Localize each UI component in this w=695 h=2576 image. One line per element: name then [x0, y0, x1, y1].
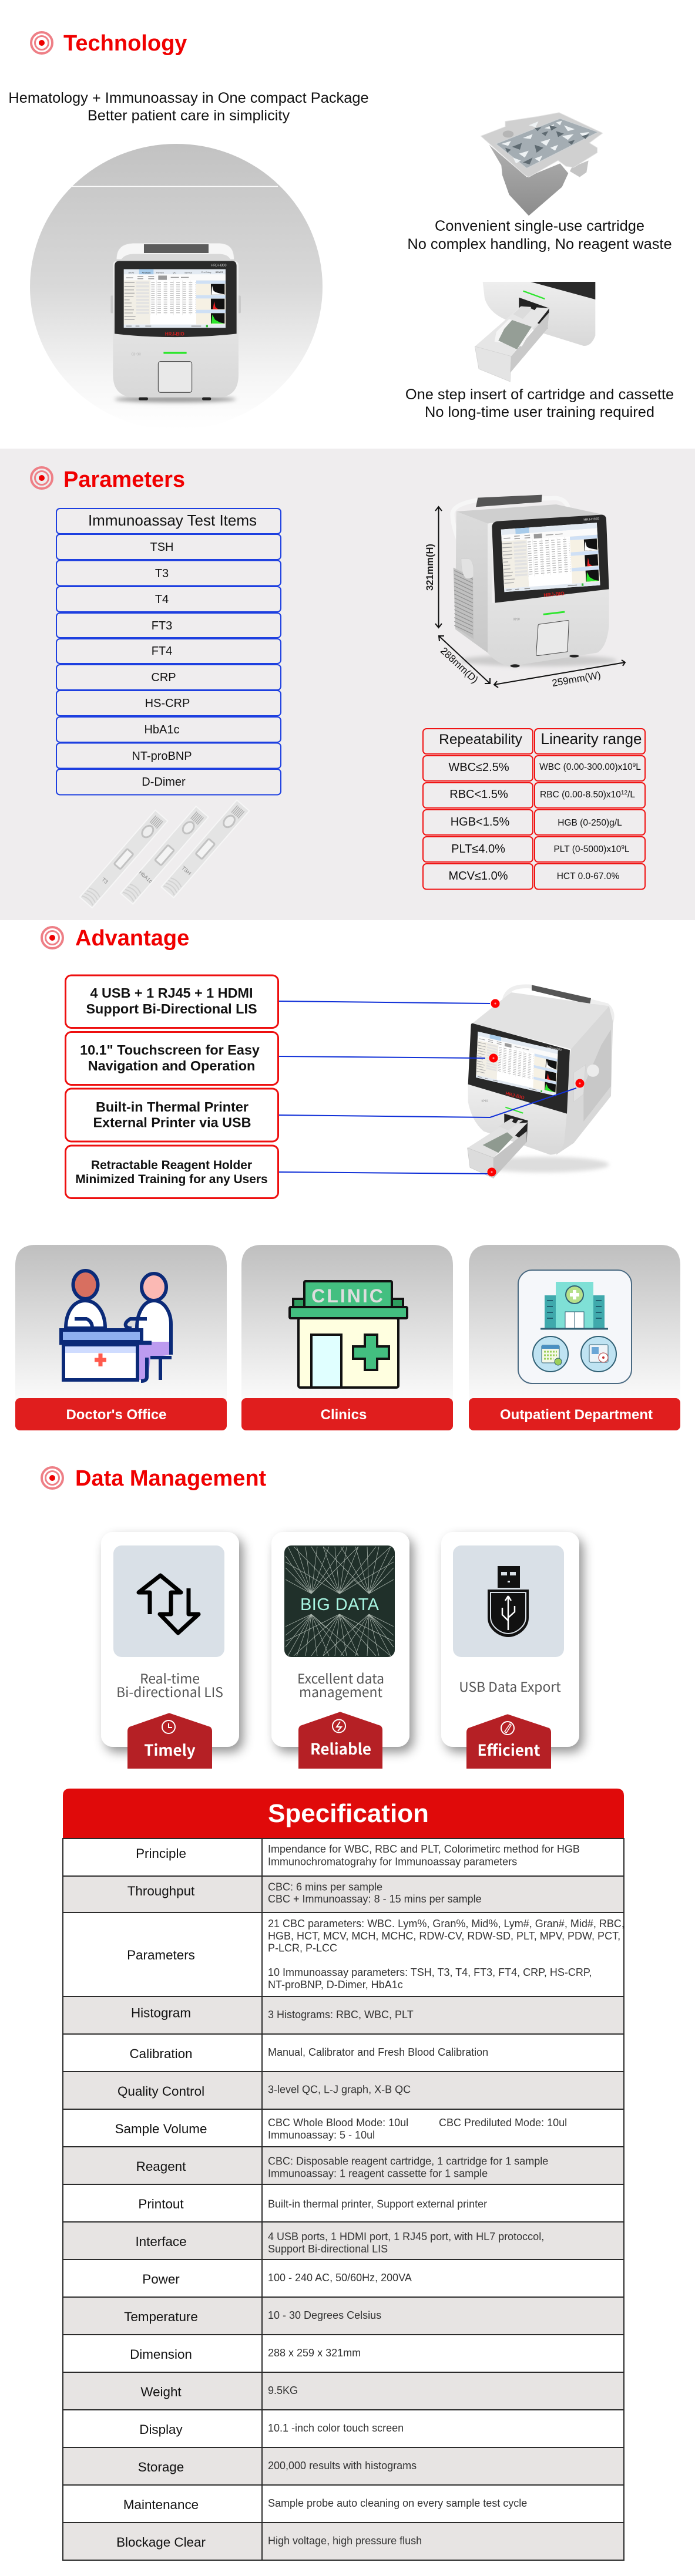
table: immunoassay test items: Immunoassay Test Items [88, 511, 257, 529]
row: Printout: Printout [138, 2197, 184, 2211]
arrow: depth 288mm(D) [438, 636, 490, 685]
row: Printout [63, 2184, 624, 2222]
image: cartridge insertion [475, 282, 595, 382]
callout 3: Built-in Thermal Printer [96, 1099, 249, 1114]
row: Sample Volume: CBC Prediluted Mode: 10ul [439, 2117, 567, 2129]
row: Blockage Clear [63, 2523, 624, 2560]
row: Histogram: 3 Histograms: RBC, WBC, PLT [268, 2009, 414, 2021]
card: Outpatient Department: Outpatient Department [500, 1407, 653, 1423]
table: linearity range: Linearity range [540, 730, 642, 747]
row: Dimension: 288 x 259 x 321mm [268, 2347, 361, 2359]
row: Maintenance [63, 2485, 624, 2523]
callout 2: Navigation and Operation [88, 1058, 255, 1073]
image: test strip T3 [80, 810, 167, 908]
heading: Technology: Technology [63, 31, 187, 56]
row: Calibration: Manual, Calibrator and Fresh Blood Calibration [268, 2046, 488, 2058]
panel: advantage [15, 926, 680, 1430]
row: Parameters: P-LCR, P-LCC [268, 1942, 337, 1954]
badge: Timely [127, 1713, 212, 1769]
product: analyzer perspective view with dimensions: (((•))) [513, 618, 520, 621]
table: linearity range: PLT (0-5000)x10 [553, 844, 621, 854]
icon: outpatient facility [518, 1270, 632, 1383]
icon: target [42, 1467, 63, 1489]
heading: Data Management: Data Management [75, 1466, 267, 1491]
callout 1 [66, 975, 499, 1028]
badge: Efficient: Efficient [478, 1739, 540, 1760]
row: Parameters: Parameters [127, 1948, 195, 1962]
icon: target [31, 467, 52, 489]
card: Excellent data management: Excellent data [297, 1668, 384, 1688]
text: intro: Hematology + Immunoassay in One compact Package [8, 90, 369, 106]
row: Principle [63, 1838, 624, 1876]
row: Display [63, 2410, 624, 2447]
icon: USB drive [488, 1566, 529, 1637]
row: Parameters: NT-proBNP, D-Dimer, HbA1c [268, 1979, 403, 1991]
table: linearity range: 12 [621, 790, 627, 796]
arrow: height 321mm(H) [425, 507, 442, 628]
product: analyzer front view: ((( • ))) [132, 352, 141, 356]
row: Throughput: CBC: 6 mins per sample [268, 1881, 382, 1893]
arrow: width 259mm(W): 259mm(W) [551, 669, 602, 689]
row: Display: Display [139, 2422, 183, 2437]
product: analyzer perspective view with dimensions [452, 495, 617, 668]
image: single-use cartridge [481, 113, 603, 215]
row: Temperature: 10 - 30 Degrees Celsius [268, 2309, 381, 2321]
row: Quality Control: Quality Control [117, 2084, 204, 2099]
row: Sample Volume: Immunoassay: 5 - 10ul [268, 2129, 375, 2141]
row: Printout: Built-in thermal printer, Support external printer [268, 2198, 487, 2210]
product: analyzer with open drawer: (((•))) [482, 1099, 488, 1102]
product: analyzer with open drawer: HRJ-BIO [505, 1091, 525, 1100]
table: linearity range: HGB (0-250)g/L [558, 818, 622, 828]
row: Calibration [63, 2034, 624, 2072]
table: repeatability [423, 729, 533, 889]
table: immunoassay test items: FT3 [152, 619, 172, 632]
product: analyzer front view: START [216, 271, 223, 274]
product: analyzer front view: QC [173, 271, 176, 274]
row: Weight [63, 2372, 624, 2410]
image: big data [284, 1545, 395, 1657]
row: Quality Control: 3-level QC, L-J graph, X-B QC [268, 2083, 411, 2095]
badge: Reliable: Reliable [310, 1737, 371, 1759]
row: Sample Volume: CBC Whole Blood Mode: 10ul [268, 2117, 408, 2129]
card: Real-time Bi-directional LIS [101, 1532, 239, 1769]
card: Excellent data management [271, 1532, 409, 1769]
row: Storage: Storage [138, 2460, 184, 2474]
row: Interface: Interface [135, 2234, 187, 2249]
panel: data management [42, 1466, 579, 1769]
card: Real-time Bi-directional LIS: Real-time [140, 1668, 200, 1688]
callout 2: 10.1" Touchscreen for Easy [80, 1042, 260, 1058]
table: repeatability: MCV≤1.0% [448, 870, 508, 883]
row: Dimension [63, 2335, 624, 2372]
table: immunoassay test items: T3 [155, 567, 169, 580]
table: linearity range: 9 [633, 762, 636, 769]
image: test strip HbA1c: HbA1c [137, 870, 154, 884]
row: Weight: 9.5KG [268, 2385, 298, 2396]
table: immunoassay test items: NT-proBNP [132, 750, 192, 763]
product: analyzer front view: Show [128, 271, 134, 274]
row: Histogram: Histogram [131, 2006, 191, 2020]
table: immunoassay test items: HbA1c [144, 723, 180, 736]
text: intro [8, 90, 369, 124]
callout 2 [66, 1032, 498, 1085]
card: Outpatient Department [469, 1245, 680, 1430]
row: Power: 100 - 240 AC, 50/60Hz, 200VA [268, 2272, 412, 2284]
image: big data: BIG DATA [300, 1595, 380, 1614]
background band [0, 449, 695, 920]
badge: Timely: Timely [144, 1739, 196, 1760]
row: Sample Volume [63, 2109, 624, 2147]
row: Reagent [63, 2147, 624, 2184]
product: analyzer front view: Analysis [142, 271, 151, 274]
table: immunoassay test items: TSH [150, 541, 174, 554]
row: Throughput: CBC + Immunoassay: 8 - 15 mins per sample [268, 1893, 482, 1905]
row: Storage [63, 2447, 624, 2485]
product: analyzer front view [110, 243, 241, 402]
text: cartridge caption [407, 218, 672, 252]
callout 1: 4 USB + 1 RJ45 + 1 HDMI [90, 985, 253, 1001]
text: intro: Better patient care in simplicity [88, 107, 290, 124]
arrow: depth 288mm(D): 288mm(D) [438, 645, 481, 685]
badge: Reliable [298, 1712, 382, 1769]
row: Parameters: HGB, HCT, MCV, MCH, MCHC, RDW-CV, RDW-SD, PLT, MPV, PDW, PCT, [268, 1930, 620, 1942]
card: USB Data Export [441, 1532, 579, 1769]
product: analyzer front view: Service [184, 271, 193, 274]
text: insertion caption: No long-time user training required [425, 404, 654, 420]
row: Storage: 200,000 results with histograms [268, 2460, 417, 2471]
row: Maintenance: Sample probe auto cleaning on every sample test cycle [268, 2497, 527, 2509]
row: Principle: Impendance for WBC, RBC and PLT, Colorimetirc method for HGB [268, 1843, 580, 1855]
icon: clinic building: CLINIC [311, 1285, 385, 1306]
card: Doctor's Office: Doctor's Office [66, 1407, 167, 1423]
row: Temperature [63, 2297, 624, 2335]
image: test strip TSH: TSH [180, 865, 192, 876]
icon: up and down arrows [139, 1575, 199, 1633]
callout 3: External Printer via USB [93, 1114, 251, 1130]
row: Principle: Immunochromatograhy for Immunoassay parameters [268, 1856, 517, 1867]
card: Real-time Bi-directional LIS: Bi-directional LIS [116, 1682, 223, 1701]
row: Interface: Support Bi-directional LIS [268, 2243, 388, 2255]
row: Display: 10.1 -inch color touch screen [268, 2422, 404, 2434]
image: test strip TSH [162, 800, 249, 898]
row: Temperature: Temperature [124, 2309, 198, 2324]
row: Histogram [63, 1996, 624, 2034]
table: repeatability: Repeatability [439, 732, 523, 747]
header: Specification: Specification [268, 1799, 429, 1828]
callout 4 [66, 1146, 496, 1198]
product: analyzer front view: Review [156, 271, 164, 274]
row: Power: Power [142, 2272, 180, 2287]
row: Principle: Principle [136, 1846, 186, 1861]
table: repeatability: RBC<1.5% [449, 788, 508, 801]
card: Doctor's Office [15, 1245, 227, 1430]
product: analyzer with open drawer: HRJ-H300 [547, 1046, 562, 1052]
badge: Efficient [466, 1715, 551, 1769]
image: test strip T3: T3 [100, 877, 109, 885]
card: Excellent data management: management [299, 1682, 382, 1701]
row: Weight: Weight [140, 2385, 182, 2399]
table: immunoassay test items [56, 509, 281, 795]
row: Reagent: CBC: Disposable reagent cartridge, 1 cartridge for 1 sample [268, 2155, 548, 2167]
callout 4: Minimized Training for any Users [75, 1173, 268, 1186]
text: cartridge caption: No complex handling, No reagent waste [407, 236, 672, 252]
card: USB Data Export: USB Data Export [459, 1676, 561, 1696]
table: repeatability: WBC≤2.5% [448, 761, 509, 774]
table: immunoassay test items: FT4 [152, 645, 172, 658]
card: Clinics: Clinics [321, 1407, 367, 1423]
text: cartridge caption: Convenient single-use cartridge [435, 218, 644, 234]
product: analyzer perspective view with dimensions: HRJ-H300 [583, 517, 599, 522]
header: Specification [63, 1789, 624, 1838]
table: linearity range: L [636, 762, 641, 772]
table: repeatability: PLT≤4.0% [451, 843, 505, 856]
row: Parameters [63, 1912, 625, 1996]
backdrop circle [30, 144, 323, 430]
row: Reagent: Immunoassay: 1 reagent cassette for 1 sample [268, 2168, 488, 2180]
table: linearity range: L [625, 844, 630, 854]
panel: technology [8, 31, 674, 430]
arrow: height 321mm(H): 321mm(H) [425, 544, 435, 591]
row: Parameters: 21 CBC parameters: WBC. Lym%, Gran%, Mid%, Lym#, Gran#, Mid#, RBC, [268, 1918, 625, 1930]
table: immunoassay test items: CRP [151, 671, 176, 684]
callout 3 [66, 1079, 584, 1141]
table: linearity range [535, 729, 645, 889]
row: Quality Control [63, 2072, 624, 2109]
product: analyzer front view: HRJ-BIO [165, 332, 184, 337]
table: specification rows [63, 1838, 625, 2560]
row: Parameters: 10 Immunoassay parameters: TSH, T3, T4, FT3, FT4, CRP, HS-CRP, [268, 1966, 592, 1978]
table: immunoassay test items: HS-CRP [145, 697, 190, 710]
table: linearity range: /L [627, 790, 635, 800]
heading: Parameters: Parameters [63, 467, 185, 492]
callout 4: Retractable Reagent Holder [91, 1159, 252, 1172]
table: linearity range: HCT 0.0-67.0% [557, 871, 619, 881]
table: linearity range: WBC (0.00-300.00)x10 [539, 762, 633, 772]
callout 1: Support Bi-Directional LIS [86, 1001, 257, 1016]
product: analyzer front view: HRJ-H300 [211, 264, 227, 268]
table: immunoassay test items: D-Dimer [142, 776, 186, 789]
table: immunoassay test items: T4 [155, 593, 169, 606]
table: repeatability: HGB<1.5% [451, 816, 510, 829]
image: test strip HbA1c [120, 806, 209, 904]
row: Reagent: Reagent [136, 2159, 186, 2174]
heading: Advantage: Advantage [75, 926, 189, 951]
panel: specification [63, 1789, 625, 2560]
icon: target [31, 32, 52, 53]
row: Throughput: Throughput [127, 1884, 195, 1898]
panel: parameters [0, 449, 695, 920]
row: Interface: 4 USB ports, 1 HDMI port, 1 RJ45 port, with HL7 protoccol, [268, 2231, 544, 2242]
icon: target [42, 927, 63, 948]
text: insertion caption: One step insert of cartridge and cassette [405, 386, 674, 403]
row: Power [63, 2260, 624, 2297]
row: Interface [63, 2222, 624, 2260]
row: Sample Volume: Sample Volume [115, 2122, 207, 2136]
product: analyzer perspective view with dimensions: HRJ-BIO [543, 590, 565, 598]
product: analyzer with open drawer [468, 985, 613, 1178]
row: Throughput [63, 1876, 624, 1912]
table: linearity range: 9 [621, 844, 625, 851]
arrow: width 259mm(W) [494, 660, 625, 689]
row: Maintenance: Maintenance [123, 2497, 199, 2512]
row: Blockage Clear: High voltage, high pressure flush [268, 2535, 422, 2547]
row: Calibration: Calibration [129, 2046, 193, 2061]
card: Clinics [241, 1245, 453, 1430]
row: Dimension: Dimension [130, 2347, 192, 2362]
text: insertion caption [405, 386, 674, 420]
row: Blockage Clear: Blockage Clear [116, 2535, 206, 2550]
product: analyzer front view: Pre-Entry [202, 271, 211, 274]
icon: clinic building [290, 1281, 407, 1388]
icon: doctor and patient [59, 1271, 172, 1381]
table: linearity range: RBC (0.00-8.50)x10 [540, 790, 621, 800]
